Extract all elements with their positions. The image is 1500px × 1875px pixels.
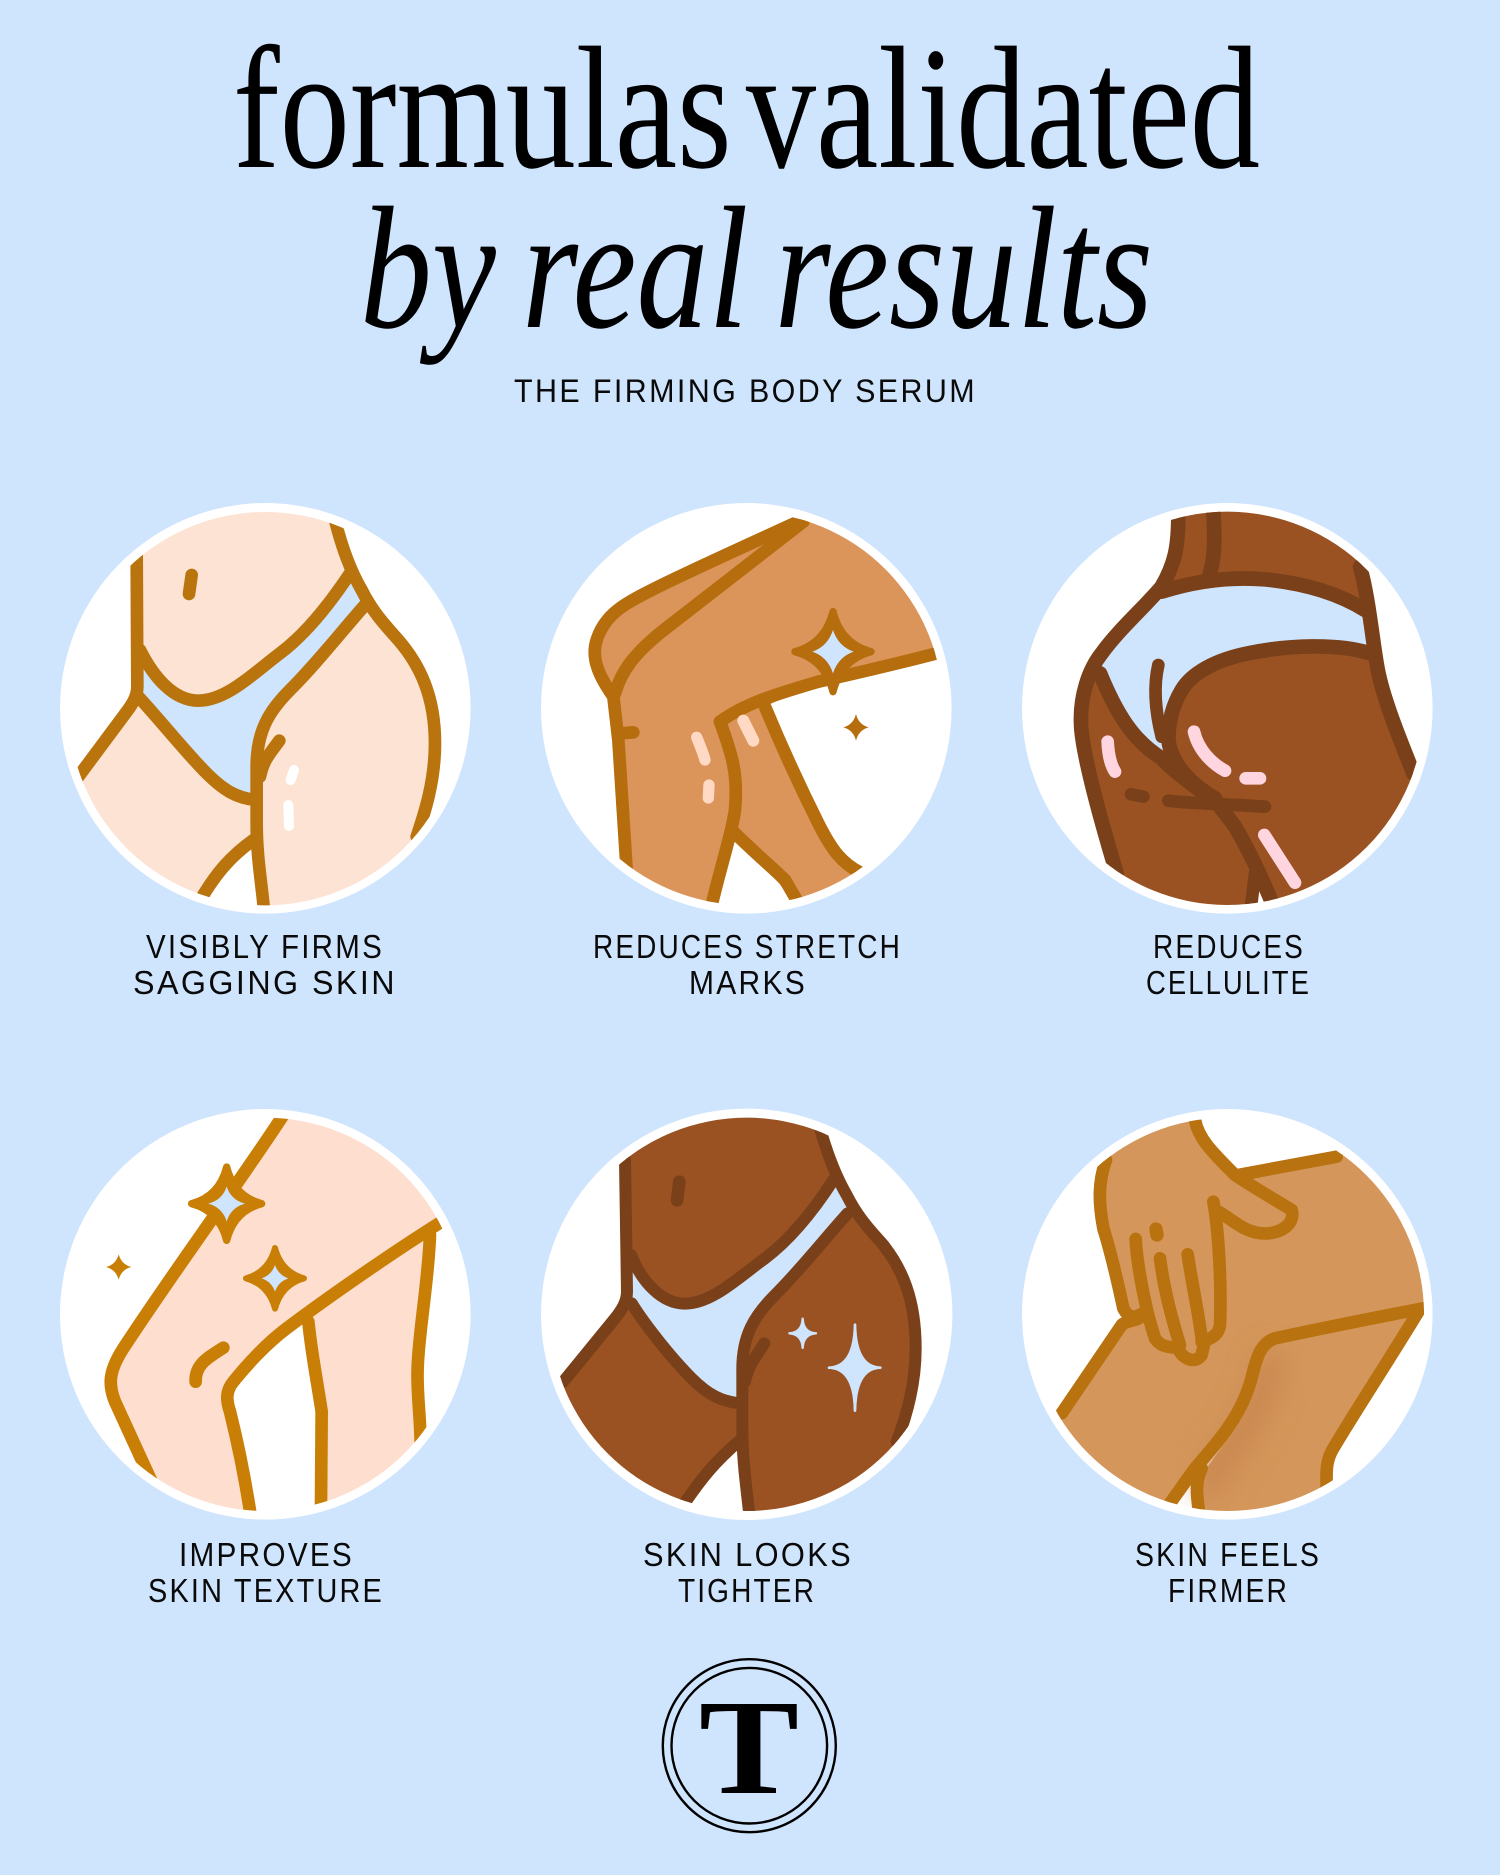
panel: visibly firms sagging skin bbox=[60, 503, 471, 1001]
title: formulas validated bbox=[233, 11, 1260, 205]
illustration: dark torso with sparkles bbox=[555, 1108, 917, 1528]
caption: REDUCES STRETCH bbox=[593, 928, 902, 965]
caption bbox=[148, 1536, 384, 1609]
caption bbox=[133, 928, 397, 1001]
caption: SKIN TEXTURE bbox=[148, 1572, 384, 1609]
title: by real results bbox=[360, 171, 1153, 365]
illustration: pale bent knee with sparkles bbox=[104, 1118, 442, 1511]
icon: large sparkle bbox=[829, 1325, 880, 1411]
icon: small sparkle bbox=[106, 1254, 131, 1280]
white disc bbox=[1022, 503, 1433, 914]
caption: FIRMER bbox=[1168, 1572, 1289, 1609]
panel: improves skin texture bbox=[60, 1109, 473, 1609]
title bbox=[233, 11, 1260, 365]
illustration: bent knee with sparkles bbox=[588, 517, 937, 904]
caption: REDUCES bbox=[1153, 928, 1305, 965]
white disc bbox=[541, 1109, 952, 1520]
caption: IMPROVES bbox=[179, 1536, 354, 1573]
caption: SKIN FEELS bbox=[1135, 1536, 1321, 1573]
panel: reduces cellulite bbox=[1022, 503, 1438, 1001]
icon: small sparkle bbox=[843, 714, 869, 741]
logo: T monogram in double ring bbox=[663, 1659, 836, 1832]
caption bbox=[1146, 928, 1311, 1001]
caption bbox=[593, 928, 902, 1001]
caption: TIGHTER bbox=[678, 1572, 816, 1609]
caption: CELLULITE bbox=[1146, 964, 1311, 1001]
illustration: dark skin rear view with pink highlights bbox=[1081, 503, 1438, 923]
illustration: hand pressing on thigh bbox=[1056, 1119, 1424, 1511]
icon: large sparkle bbox=[192, 1167, 262, 1240]
white disc bbox=[60, 1109, 471, 1520]
icon: medium sparkle bbox=[246, 1248, 304, 1309]
icon: small sparkle bbox=[789, 1319, 816, 1348]
panel: reduces stretch marks bbox=[541, 503, 958, 1001]
white disc bbox=[1022, 1109, 1433, 1520]
caption: VISIBLY FIRMS bbox=[146, 928, 384, 965]
caption: SAGGING SKIN bbox=[133, 964, 397, 1001]
panel: skin looks tighter bbox=[541, 1108, 952, 1609]
caption bbox=[1135, 1536, 1321, 1609]
panel: skin feels firmer bbox=[1022, 1108, 1438, 1609]
white disc bbox=[541, 503, 952, 914]
caption: MARKS bbox=[689, 964, 807, 1001]
illustration: pale torso with blue underwear bbox=[73, 503, 435, 923]
icon: large sparkle bbox=[795, 612, 871, 692]
shadow behind knee bbox=[1208, 1355, 1275, 1495]
caption bbox=[643, 1536, 853, 1609]
white disc bbox=[60, 503, 471, 914]
logo: T monogram in double ring: T bbox=[699, 1673, 799, 1823]
subtitle: THE FIRMING BODY SERUM bbox=[514, 373, 977, 409]
caption: SKIN LOOKS bbox=[643, 1536, 853, 1573]
